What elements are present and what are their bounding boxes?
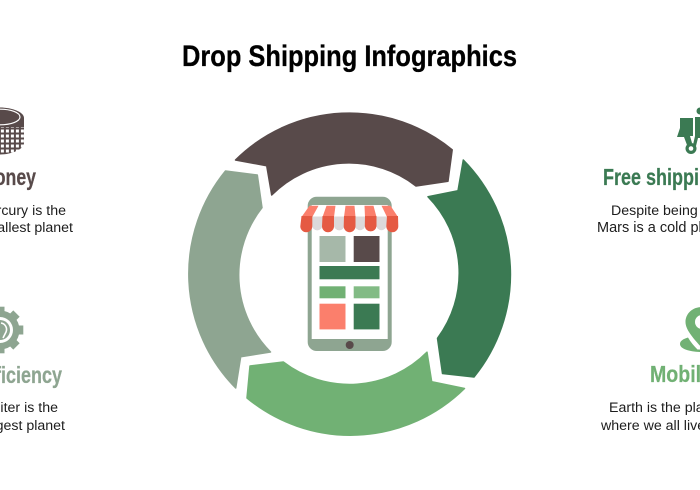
block: Money [0, 108, 73, 236]
block: Efficiency [0, 307, 65, 434]
arrow segment: grey green [189, 171, 270, 388]
banner bar [320, 266, 380, 279]
phone body [308, 197, 392, 351]
small tile: pale green [354, 286, 380, 298]
home button [346, 341, 354, 349]
small tile: green [320, 286, 346, 298]
product tile: dark green [354, 304, 380, 329]
arrow segment: brown [236, 113, 452, 195]
block: Mobile [600, 307, 700, 434]
icon: gear [0, 307, 23, 353]
phone store icon [300, 197, 398, 351]
arrow segment: light green [247, 352, 464, 435]
product tile: grey [320, 236, 346, 262]
icon: hand truck with boxes [677, 108, 700, 154]
product tile: brown [354, 236, 380, 262]
icon: map pin [680, 307, 700, 352]
block: Free shipping [597, 108, 700, 236]
phone screen [312, 205, 388, 339]
cycle diagram [189, 113, 510, 435]
awning [300, 206, 398, 232]
arrow segment: dark green [428, 160, 510, 377]
icon: coin stack [0, 108, 24, 154]
product tile: salmon [320, 304, 346, 329]
title: Drop Shipping Infographics [182, 40, 517, 73]
